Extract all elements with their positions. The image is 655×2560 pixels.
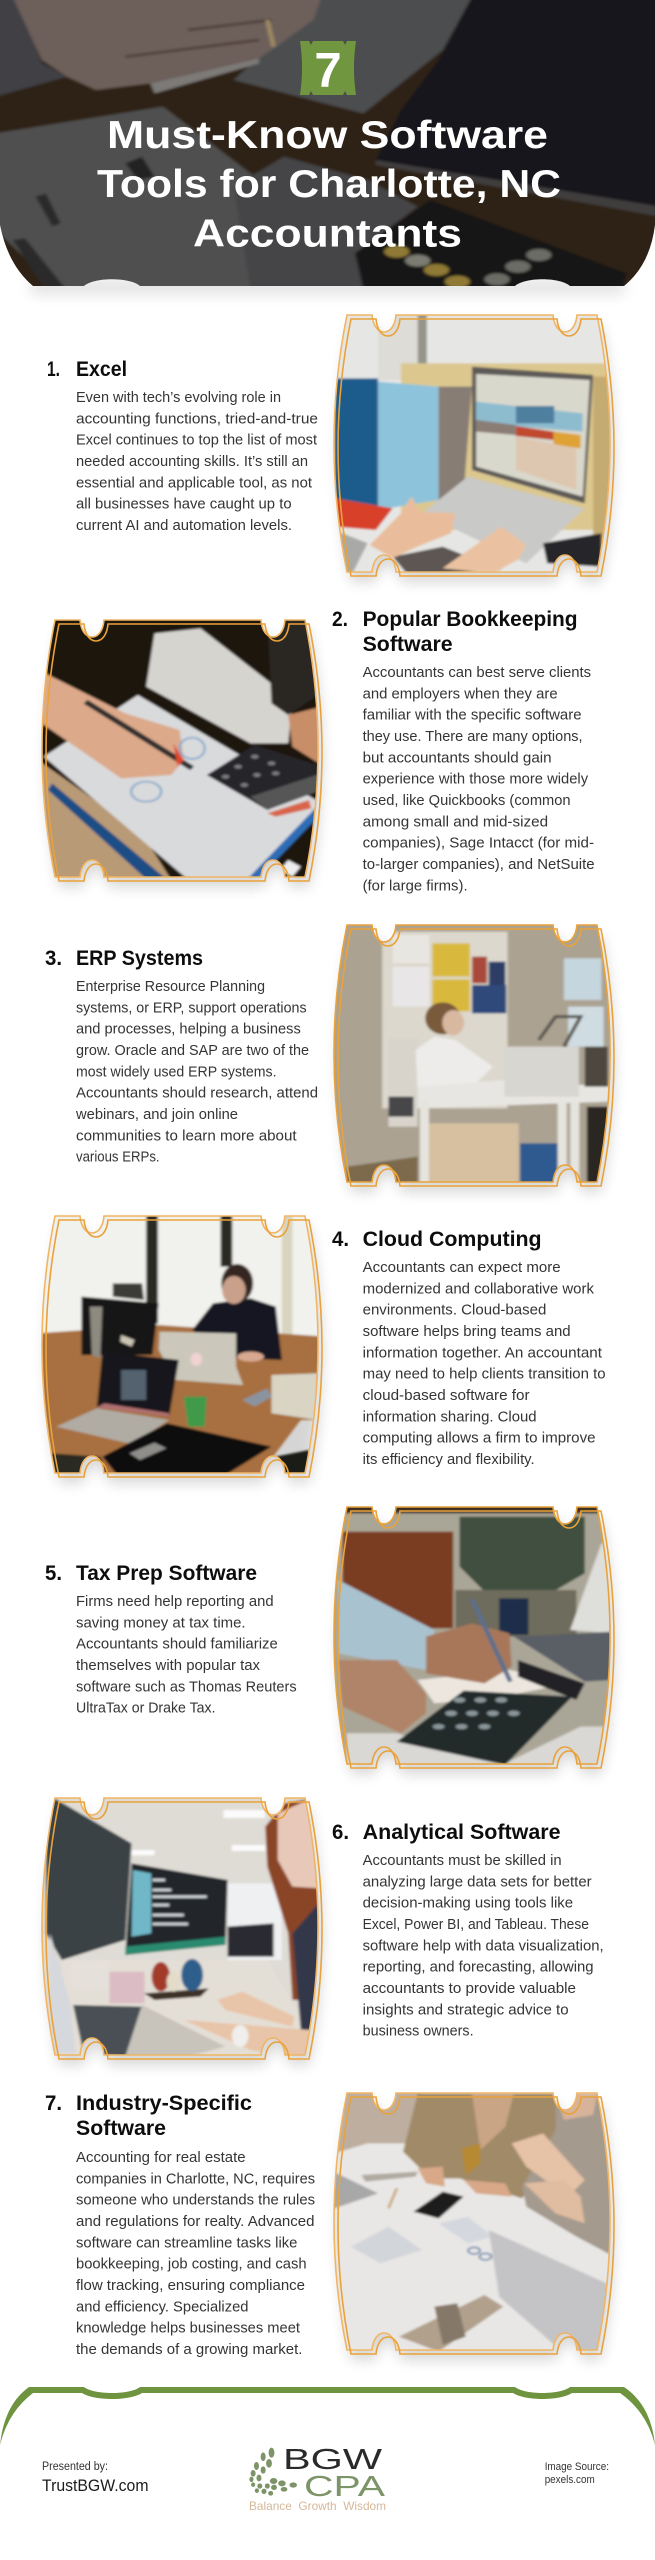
panel: 7 Industry-Specific Software text: bookkeeping, job costing, and cash: [76, 2257, 307, 2273]
panel: 2 Popular Bookkeeping Software text: (for large firms).: [363, 878, 468, 894]
title: Accountants: [193, 212, 462, 256]
panel: 5 Tax Prep Software text: saving money at tax time.: [76, 1615, 246, 1631]
footer arc: [0, 2387, 655, 2560]
panel: 2 Popular Bookkeeping Software photo: [38, 617, 326, 887]
panel: 1 Excel text: essential and applicable tool, as not: [76, 475, 312, 491]
panel: 3 ERP Systems text: systems, or ERP, support operations: [76, 1000, 307, 1016]
panel: 3 ERP Systems text: webinars, and join online: [75, 1107, 238, 1123]
panel: 5 Tax Prep Software text: Tax Prep Software: [76, 1562, 257, 1585]
title: Must-Know Software: [107, 114, 548, 157]
panel: 2 Popular Bookkeeping Software text: Accountants can best serve clients: [363, 665, 591, 681]
panel: 2 Popular Bookkeeping Software text: familiar with the specific software: [363, 708, 582, 724]
panel: 4 Cloud Computing text: modernized and collaborative work: [363, 1281, 595, 1297]
panel: 4 Cloud Computing text: computing allows a firm to improve: [363, 1431, 596, 1447]
panel: 2 Popular Bookkeeping Software text: companies), Sage Intacct (for mid-: [363, 836, 594, 852]
panel: 4 Cloud Computing photo: [38, 1213, 326, 1487]
panel: 7 Industry-Specific Software text: Industry-Specific: [76, 2092, 252, 2115]
panel: 2 Popular Bookkeeping Software text: [332, 608, 595, 894]
panel: 2 Popular Bookkeeping Software text: used, like Quickbooks (common: [363, 793, 571, 809]
panel: 4 Cloud Computing text: software helps bring teams and: [363, 1324, 571, 1340]
panel: 1 Excel text: accounting functions, tried-and-true: [76, 411, 318, 427]
panel: 5 Tax Prep Software text: Accountants should familiarize: [76, 1637, 278, 1653]
panel: 1 Excel photo: [330, 310, 622, 583]
panel: 4 Cloud Computing text: information sharing. Cloud: [363, 1409, 537, 1425]
panel: 4 Cloud Computing text: 4.: [332, 1228, 349, 1251]
title: [97, 114, 561, 256]
panel: 7 Industry-Specific Software text: software can streamline tasks like: [76, 2235, 297, 2251]
panel: 2 Popular Bookkeeping Software text: among small and mid-sized: [363, 814, 548, 830]
panel: 7 Industry-Specific Software text: someone who understands the rules: [76, 2193, 315, 2209]
panel: 6 Analytical Software photo: [38, 1793, 326, 2065]
panel: 1 Excel text: Excel continues to top the list of most: [76, 433, 317, 449]
panel: 5 Tax Prep Software photo: [330, 1503, 622, 1777]
panel: 4 Cloud Computing text: [332, 1228, 606, 1468]
panel: 1 Excel text: needed accounting skills. It’s still an: [76, 454, 308, 470]
panel: 7 Industry-Specific Software photo: [330, 2090, 622, 2360]
panel: 6 Analytical Software text: business owners.: [363, 2024, 474, 2040]
panel: 6 Analytical Software text: [332, 1821, 604, 2040]
panel: 4 Cloud Computing text: environments. Cloud-based: [363, 1303, 546, 1319]
panel: 7 Industry-Specific Software text: companies in Charlotte, NC, requires: [76, 2171, 315, 2187]
footer: image source: pexels.com: [545, 2474, 595, 2486]
panel: 7 Industry-Specific Software text: knowledge helps businesses meet: [76, 2321, 300, 2337]
panel: 6 Analytical Software text: software help with data visualization,: [363, 1938, 604, 1954]
panel: 6 Analytical Software text: 6.: [332, 1821, 349, 1844]
panel: 1 Excel text: all businesses have caught up to: [76, 497, 292, 513]
panel: 7 Industry-Specific Software text: 7.: [45, 2092, 62, 2115]
panel: 4 Cloud Computing text: information together. An accountant: [363, 1345, 602, 1361]
panel: 3 ERP Systems text: 3.: [45, 947, 62, 970]
panel: 4 Cloud Computing text: Cloud Computing: [363, 1228, 542, 1251]
panel: 6 Analytical Software text: reporting, and forecasting, allowing: [363, 1960, 594, 1976]
panel: 2 Popular Bookkeeping Software text: Software: [363, 633, 453, 656]
badge: number 7: [300, 41, 356, 98]
footer: image source: Image Source:: [545, 2461, 609, 2473]
panel: 2 Popular Bookkeeping Software text: but accountants should gain: [363, 750, 552, 766]
panel: 2 Popular Bookkeeping Software text: Popular Bookkeeping: [363, 608, 578, 631]
panel: 7 Industry-Specific Software text: and regulations for realty. Advanced: [76, 2214, 314, 2230]
panel: 3 ERP Systems text: [45, 947, 318, 1166]
panel: 6 Analytical Software text: decision-making using tools like: [363, 1896, 573, 1912]
panel: 6 Analytical Software text: Accountants must be skilled in: [363, 1853, 562, 1869]
panel: 7 Industry-Specific Software text: and efficiency. Specialized: [76, 2299, 248, 2315]
panel: 1 Excel text: 1.: [47, 358, 60, 381]
panel: 1 Excel text: current AI and automation levels.: [76, 518, 292, 534]
logo: BGW CPA: [249, 2444, 386, 2513]
panel: 6 Analytical Software text: Analytical Software: [363, 1821, 561, 1844]
panel: 4 Cloud Computing text: its efficiency and flexibility.: [363, 1452, 535, 1468]
panel: 3 ERP Systems text: Enterprise Resource Planning: [76, 979, 265, 995]
panel: 4 Cloud Computing text: cloud-based software for: [363, 1388, 530, 1404]
panel: 7 Industry-Specific Software text: the demands of a growing market.: [76, 2342, 302, 2358]
footer: presented by: Presented by:: [42, 2461, 108, 2473]
panel: 5 Tax Prep Software text: 5.: [45, 1562, 62, 1585]
panel: 4 Cloud Computing text: may need to help clients transition to: [363, 1367, 606, 1383]
panel: 7 Industry-Specific Software text: Accounting for real estate: [76, 2150, 246, 2166]
panel: 3 ERP Systems text: most widely used ERP systems.: [76, 1064, 276, 1080]
panel: 2 Popular Bookkeeping Software text: and employers when they are: [363, 686, 558, 702]
panel: 3 ERP Systems text: Accountants should research, attend: [76, 1086, 318, 1102]
panel: 3 ERP Systems photo: [330, 920, 622, 1192]
footer: presented by: TrustBGW.com: [42, 2476, 148, 2495]
panel: 5 Tax Prep Software text: [45, 1562, 297, 1717]
panel: 3 ERP Systems text: various ERPs.: [76, 1150, 160, 1166]
header shadow: [30, 280, 625, 294]
logo: BGW CPA: Balance Growth Wisdom: [249, 2499, 386, 2513]
icon: leaf arc: [249, 2448, 297, 2496]
title: Tools for Charlotte, NC: [97, 163, 561, 206]
panel: 6 Analytical Software text: analyzing large data sets for better: [363, 1874, 592, 1890]
panel: 7 Industry-Specific Software text: Software: [76, 2117, 166, 2140]
panel: 1 Excel text: [47, 358, 318, 534]
panel: 5 Tax Prep Software text: themselves with popular tax: [76, 1658, 261, 1674]
footer: image source: [545, 2461, 609, 2486]
panel: 3 ERP Systems text: ERP Systems: [76, 947, 203, 970]
panel: 2 Popular Bookkeeping Software text: they use. There are many options,: [363, 729, 583, 745]
footer: presented by: [42, 2461, 148, 2495]
badge: number 7: 7: [314, 44, 342, 98]
panel: 2 Popular Bookkeeping Software text: 2.: [332, 608, 348, 631]
logo: BGW CPA: BGW: [283, 2444, 383, 2476]
panel: 2 Popular Bookkeeping Software text: to-larger companies), and NetSuite: [363, 857, 595, 873]
panel: 3 ERP Systems text: communities to learn more about: [76, 1128, 297, 1144]
panel: 4 Cloud Computing text: Accountants can expect more: [363, 1260, 561, 1276]
panel: 3 ERP Systems text: grow. Oracle and SAP are two of the: [76, 1043, 309, 1059]
panel: 7 Industry-Specific Software text: flow tracking, ensuring compliance: [76, 2278, 305, 2294]
panel: 2 Popular Bookkeeping Software text: experience with those more widely: [363, 772, 589, 788]
panel: 1 Excel text: Even with tech’s evolving role in: [76, 390, 281, 406]
logo: BGW CPA: CPA: [304, 2471, 386, 2503]
panel: 5 Tax Prep Software text: software such as Thomas Reuters: [76, 1679, 297, 1695]
panel: 1 Excel text: Excel: [76, 358, 127, 381]
panel: 5 Tax Prep Software text: Firms need help reporting and: [76, 1594, 274, 1610]
panel: 5 Tax Prep Software text: UltraTax or Drake Tax.: [76, 1701, 216, 1717]
panel: 7 Industry-Specific Software text: [45, 2092, 315, 2358]
panel: 6 Analytical Software text: Excel, Power BI, and Tableau. These: [363, 1917, 589, 1933]
panel: 6 Analytical Software text: insights and strategic advice to: [363, 2002, 569, 2018]
header photo: hand, papers, laptop and calculator: [0, 0, 655, 290]
panel: 3 ERP Systems text: and processes, helping a business: [76, 1022, 301, 1038]
panel: 6 Analytical Software text: accountants to provide valuable: [363, 1981, 576, 1997]
